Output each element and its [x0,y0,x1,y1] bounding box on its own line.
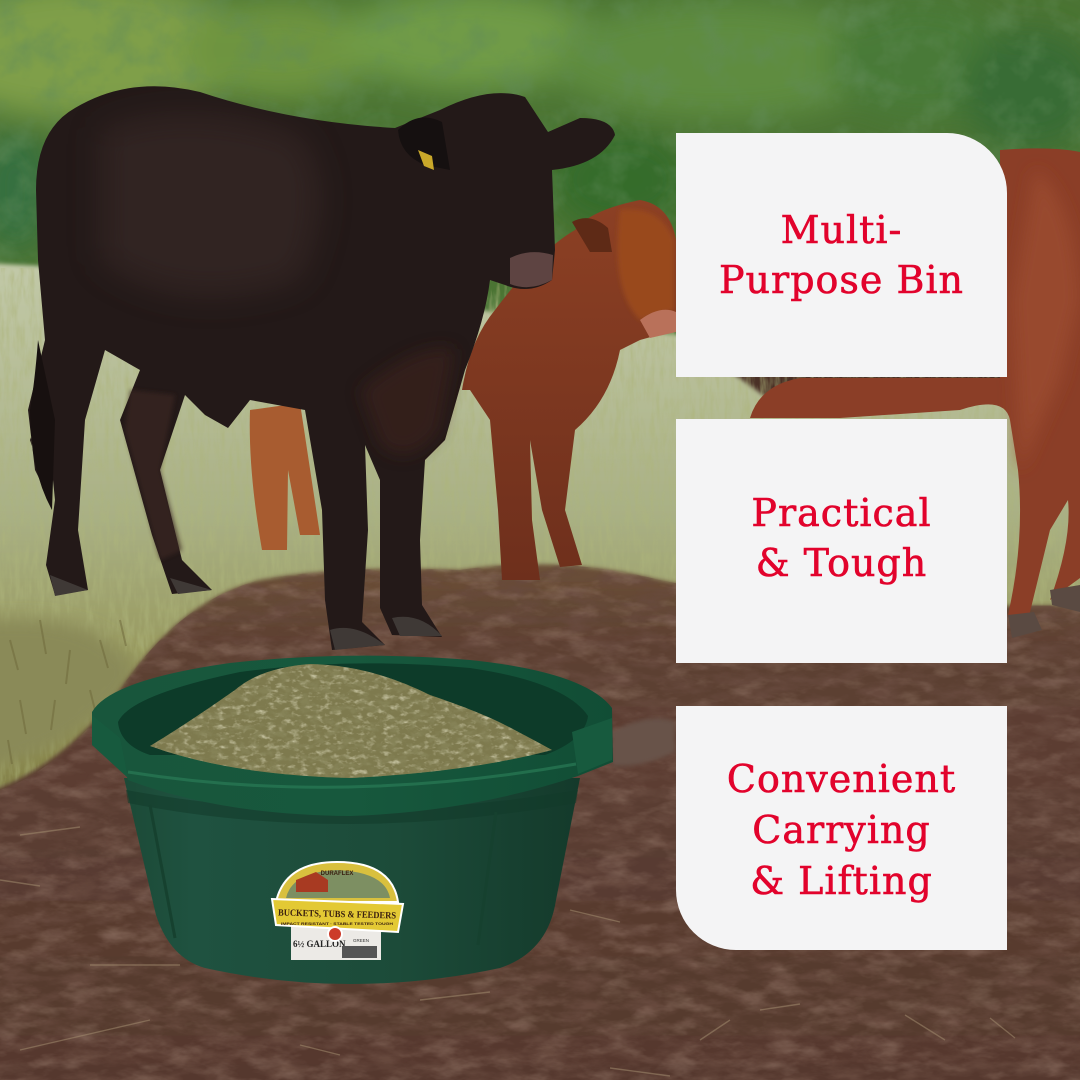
product: green feed tub [92,656,613,984]
background: tree line [0,0,1080,350]
tub label: 6½ GALLON [293,939,346,949]
animal: black cow [28,86,615,650]
card: convenient carrying and lifting: Convenient [727,756,956,800]
tub interior [118,663,588,755]
tub handles [92,715,612,778]
background: soil ground [0,560,1080,1080]
card: practical and tough: & Tough [756,541,927,585]
card: practical and tough: Practical [751,490,932,534]
tub rim [92,656,613,816]
tub label: GREEN [353,938,369,943]
tub body [124,778,580,984]
hay feed [148,662,554,780]
card: convenient carrying and lifting: & Lifting [750,858,933,902]
card: convenient carrying and lifting: Carrying [752,808,931,852]
background: grass field [0,262,1080,830]
tub label: BUCKETS, TUBS & FEEDERS [278,908,396,922]
rock on ground [612,719,675,766]
card: multi-purpose bin: Purpose Bin [719,258,964,302]
tub label [272,862,403,960]
card: multi-purpose bin [676,133,1007,377]
tub label: DURAFLEX [321,871,353,877]
animal: brown calf, centre [250,200,676,580]
card: convenient carrying and lifting [676,706,1007,950]
animal: brown cow, back right [750,148,1080,638]
tub label: IMPACT RESISTANT · STABLE TESTED TOUGH [281,921,393,926]
card: multi-purpose bin: Multi- [781,208,902,252]
card: practical and tough [676,419,1007,663]
